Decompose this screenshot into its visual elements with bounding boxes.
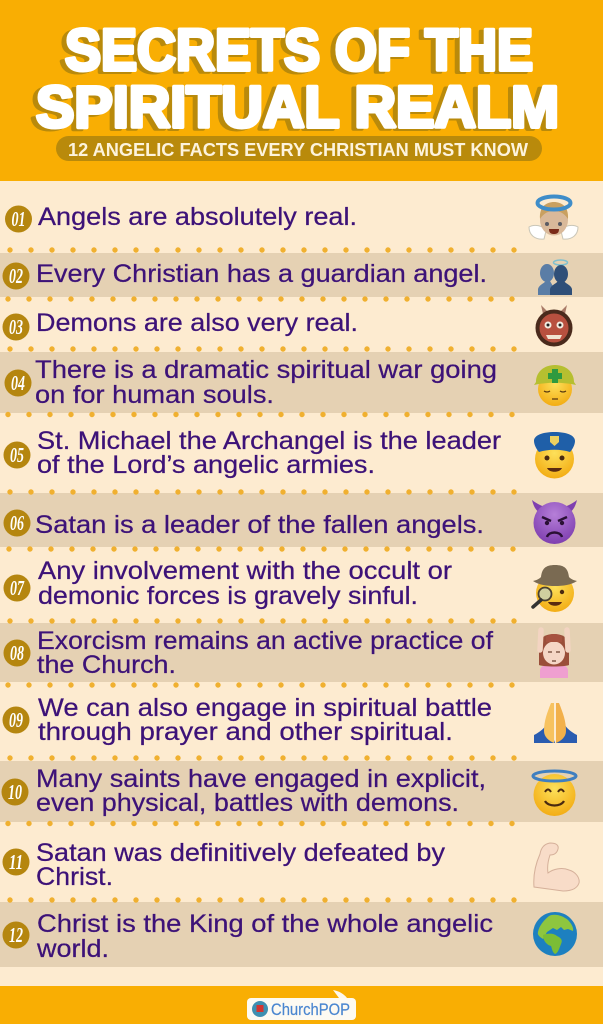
row 06: Satan is a leader of the fallen angels. (35, 511, 484, 539)
row 03: Demons are also very real. (36, 309, 358, 337)
title: SECRETS OF THE (65, 18, 533, 83)
row 06: 06 (10, 511, 24, 535)
row 10: even physical, battles with demons. (36, 789, 459, 817)
subtitle pill: 12 ANGELIC FACTS EVERY CHRISTIAN MUST KNOW (68, 140, 528, 160)
row 07: 07 (10, 576, 25, 600)
row 01: 01 (12, 207, 26, 231)
ChurchPOP logo: ChurchPOP (271, 1000, 350, 1019)
alternating row bands (0, 253, 603, 967)
icon: purple devil (532, 500, 577, 544)
row 05: 05 (10, 443, 24, 467)
header banner (0, 0, 603, 181)
icon: helmet face (534, 365, 576, 406)
row 04: 04 (11, 371, 25, 395)
row 09: We can also engage in spiritual battle (38, 694, 492, 722)
row 10: Many saints have engaged in explicit, (36, 765, 486, 793)
row 09: through prayer and other spiritual. (38, 718, 453, 746)
icon: detective (533, 565, 577, 612)
row 12: 12 (9, 923, 23, 947)
title: SPIRITUAL REALM (36, 75, 559, 140)
icon: flexed biceps (534, 843, 579, 891)
footer banner (0, 986, 603, 1024)
row 10 (2, 765, 486, 817)
icon: smiling face with halo (533, 771, 576, 816)
icon: silhouettes with halo (538, 260, 572, 295)
row 02: Every Christian has a guardian angel. (36, 260, 487, 288)
row 07 (4, 557, 452, 610)
row 09: 09 (9, 708, 23, 732)
title (31, 18, 559, 142)
row 08: the Church. (37, 651, 176, 679)
row 09 (2, 694, 492, 746)
icon: praying hands (534, 703, 577, 743)
row 10: 10 (8, 780, 22, 804)
row 11: Satan was definitively defeated by (36, 839, 446, 867)
row 05 (4, 427, 501, 479)
row 04: on for human souls. (35, 381, 274, 409)
row 08 (4, 627, 493, 679)
icon: red oni demon (538, 305, 570, 344)
row 04 (4, 356, 497, 409)
icon: baby angel (529, 196, 578, 239)
row 04: There is a dramatic spiritual war going (35, 356, 497, 384)
row 07: Any involvement with the occult or (38, 557, 452, 585)
title: SPIRITUAL REALM (31, 77, 554, 142)
row 12 (2, 910, 493, 963)
title: SECRETS OF THE (60, 20, 528, 85)
row 03: 03 (9, 315, 23, 339)
row 12: world. (36, 935, 109, 963)
row 02: 02 (9, 264, 23, 288)
row 05: of the Lord’s angelic armies. (37, 451, 375, 479)
row 08: Exorcism remains an active practice of (37, 627, 493, 655)
row 12: Christ is the King of the whole angelic (37, 910, 493, 938)
row 01: Angels are absolutely real. (38, 203, 357, 231)
row 11: Christ. (36, 863, 113, 891)
icon: police officer (534, 432, 575, 478)
row 05: St. Michael the Archangel is the leader (37, 427, 501, 455)
row 11 (2, 839, 446, 891)
row 11: 11 (9, 850, 23, 874)
ChurchPOP logo (247, 990, 356, 1020)
row 08: 08 (10, 641, 24, 665)
icon: face massage woman (539, 630, 569, 678)
row 07: demonic forces is gravely sinful. (38, 582, 418, 610)
icon: globe (533, 912, 577, 956)
